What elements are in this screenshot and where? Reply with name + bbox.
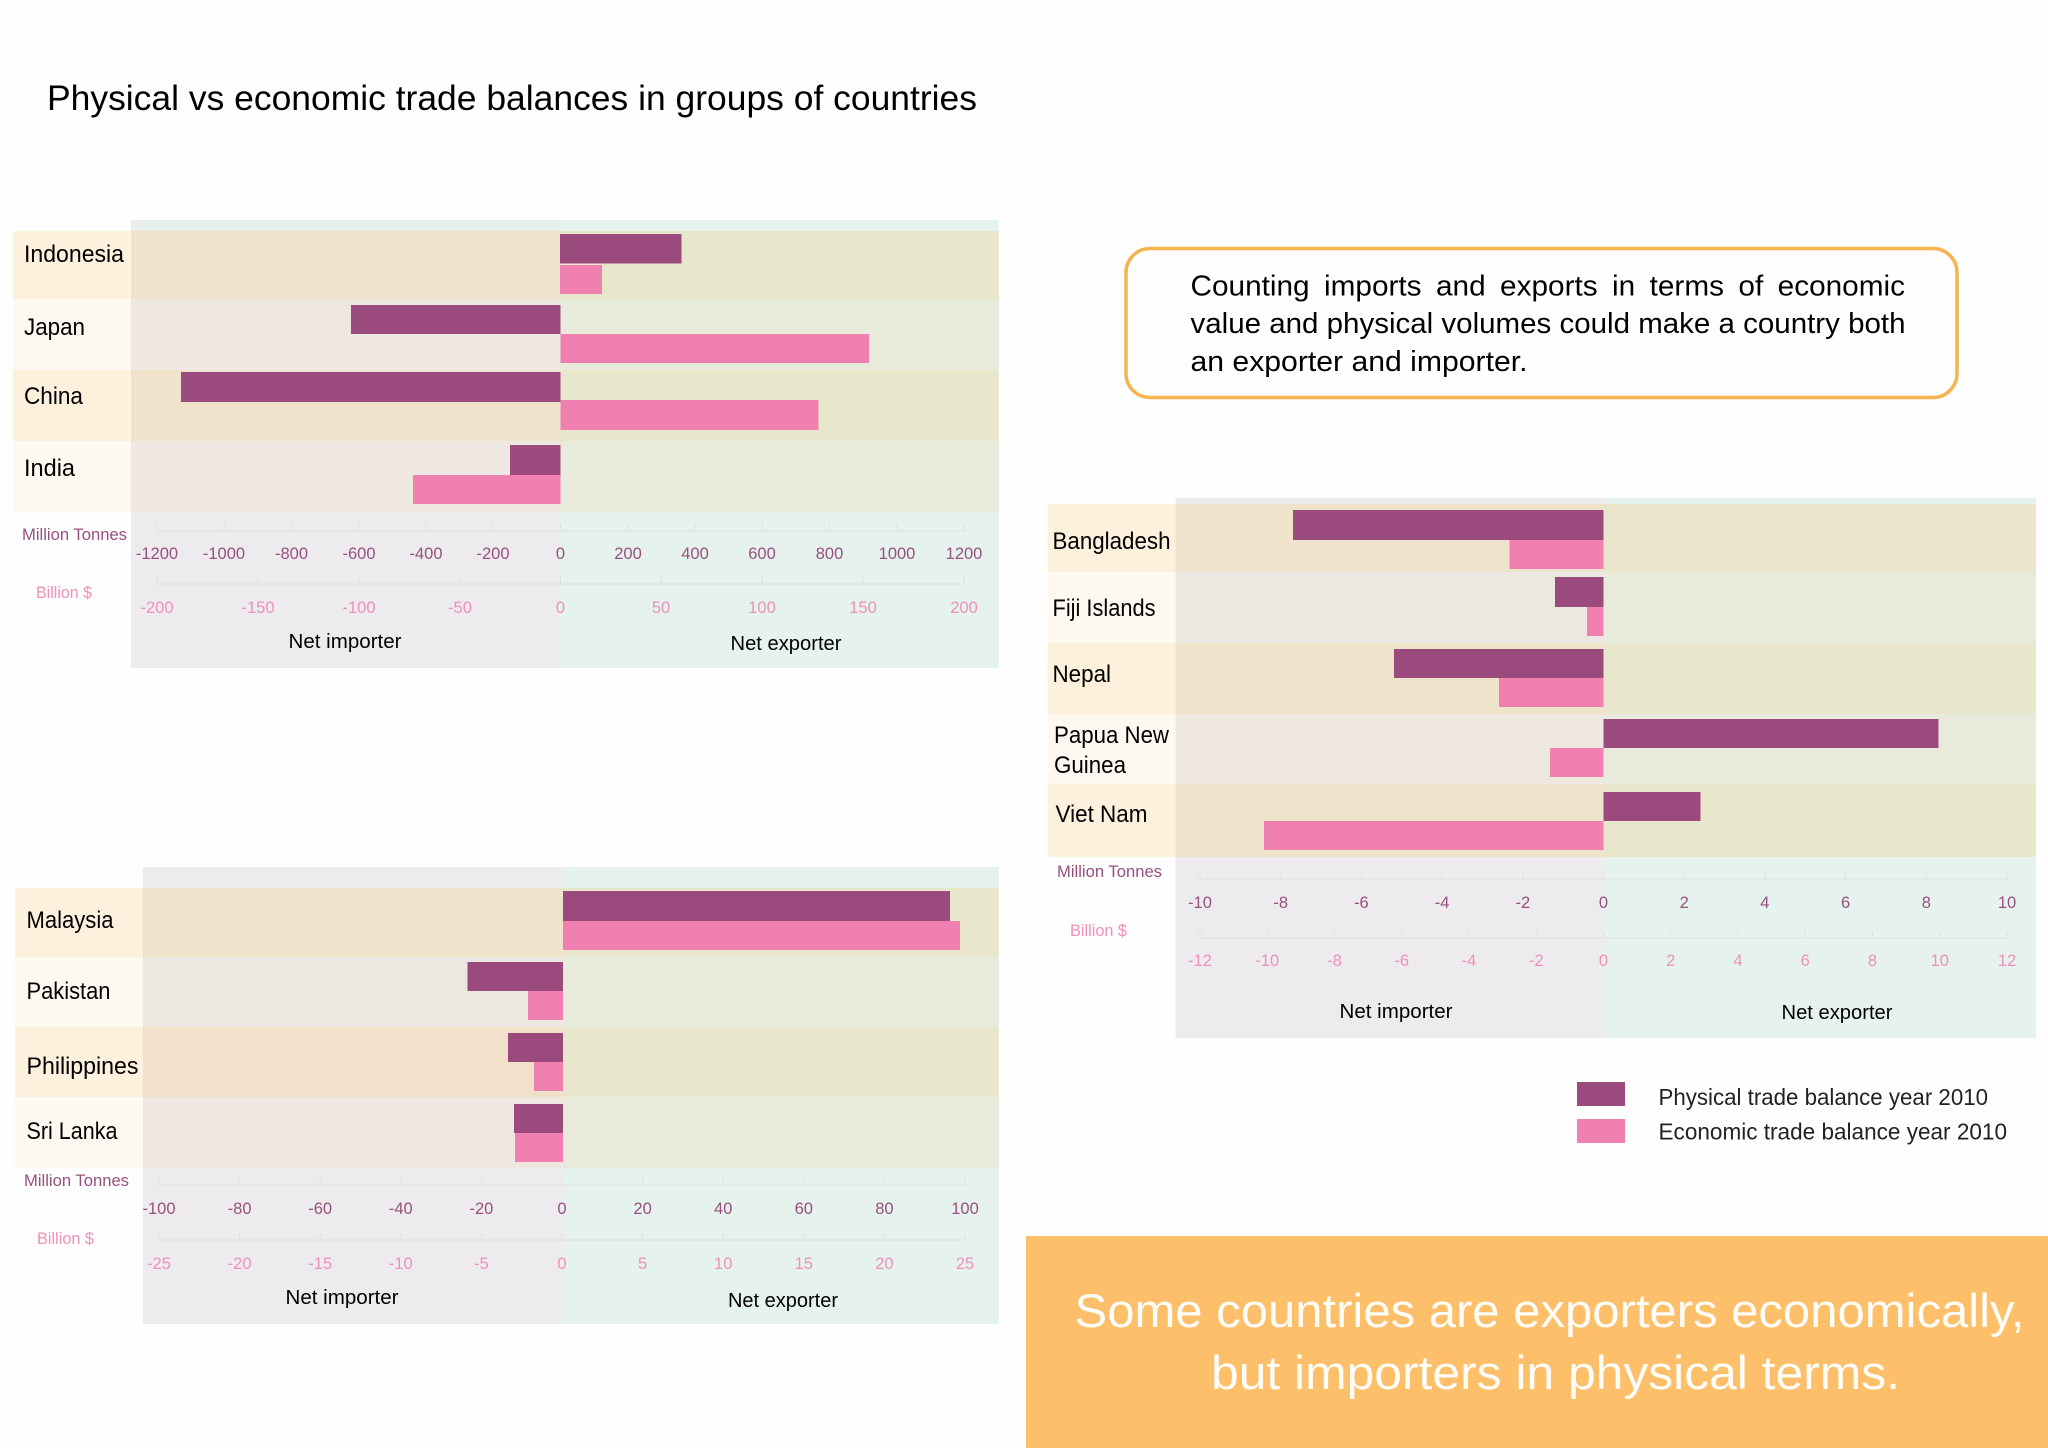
axis: billion dollars: -5 <box>474 1255 489 1273</box>
axis: million tonnes <box>24 1172 979 1218</box>
bars: Viet Nam <box>1264 792 1700 850</box>
bars: Pakistan <box>468 962 563 1020</box>
bars: Fiji Islands <box>1555 577 1604 636</box>
axis: billion dollars: 10 <box>1931 952 1949 970</box>
axis: billion dollars <box>36 575 978 617</box>
axis: billion dollars: -25 <box>147 1255 171 1273</box>
axis: million tonnes: 40 <box>714 1200 732 1218</box>
panel: chart Malaysia Pakistan Philippines Sri Lanka <box>15 867 999 1324</box>
axis: billion dollars: 5 <box>638 1255 647 1273</box>
axis: million tonnes: -400 <box>409 545 443 563</box>
axis: million tonnes: -20 <box>469 1200 493 1218</box>
title: Physical vs economic trade balances in groups of countries <box>47 79 977 118</box>
label: Fiji Islands: Fiji Islands <box>1052 595 1156 622</box>
axis: million tonnes: -100 <box>142 1200 176 1218</box>
axis: billion dollars: 2 <box>1666 952 1675 970</box>
label: India: India <box>24 455 76 482</box>
axis: billion dollars: 0 <box>556 599 565 617</box>
axis: billion dollars: -8 <box>1327 952 1342 970</box>
label: Japan: Japan <box>24 314 85 341</box>
axis: billion dollars: -4 <box>1462 952 1476 970</box>
label: Philippines: Philippines <box>26 1053 138 1080</box>
axis: billion dollars: Billion $ <box>36 584 92 602</box>
axis: million tonnes: 4 <box>1760 894 1769 912</box>
axis: billion dollars <box>37 1230 974 1273</box>
axis: billion dollars: -15 <box>308 1255 332 1273</box>
axis: million tonnes: -1200 <box>136 545 178 563</box>
label: Papua New Guinea <box>1054 722 1170 779</box>
bars: Japan <box>351 305 869 363</box>
panel: chart Bangladesh Fiji Nepal Papua New Guinea Viet Nam <box>1048 498 2036 1038</box>
callout: counting imports and exports: Counting imports and exports in terms of economic <box>1190 270 1905 302</box>
axis: million tonnes: 60 <box>795 1200 813 1218</box>
label: Indonesia: Indonesia <box>24 241 125 268</box>
bars: China <box>181 372 818 430</box>
label: Malaysia: Malaysia <box>26 907 114 934</box>
label: Sri Lanka: Sri Lanka <box>26 1118 118 1145</box>
axis: million tonnes: -10 <box>1188 894 1212 912</box>
axis: billion dollars: 150 <box>849 599 877 617</box>
axis: million tonnes: Million Tonnes <box>24 1172 129 1190</box>
axis: billion dollars: 12 <box>1998 952 2016 970</box>
label: net importer: Net importer <box>286 1287 399 1309</box>
bars: India <box>413 445 560 504</box>
axis: billion dollars: 0 <box>557 1255 567 1273</box>
axis: million tonnes: 0 <box>557 1200 567 1218</box>
axis: million tonnes: 80 <box>875 1200 894 1218</box>
axis: billion dollars: -20 <box>228 1255 252 1273</box>
axis: billion dollars: 0 <box>1599 952 1608 970</box>
axis: million tonnes: 10 <box>1998 894 2016 912</box>
axis: million tonnes: Million Tonnes <box>22 526 127 544</box>
axis: million tonnes: -40 <box>389 1200 413 1218</box>
axis: billion dollars: -10 <box>1255 952 1279 970</box>
axis: billion dollars: Billion $ <box>37 1230 94 1248</box>
bars: Papua New Guinea <box>1550 719 1938 777</box>
bars: Indonesia <box>560 234 682 294</box>
banner: conclusion <box>1026 1236 2048 1448</box>
axis: million tonnes: 20 <box>633 1200 652 1218</box>
axis: billion dollars: -100 <box>342 599 376 617</box>
axis: million tonnes: -1000 <box>203 545 245 563</box>
axis: million tonnes: 200 <box>614 545 642 563</box>
axis: billion dollars <box>1070 922 2016 970</box>
axis: billion dollars: 6 <box>1801 952 1810 970</box>
label: China: China <box>24 383 84 410</box>
label: net exporter: Net exporter <box>728 1290 838 1312</box>
axis: million tonnes: 2 <box>1680 894 1689 912</box>
axis: billion dollars: 8 <box>1868 952 1877 970</box>
axis: million tonnes: -60 <box>308 1200 332 1218</box>
label: Viet Nam: Viet Nam <box>1056 801 1148 828</box>
label: Papua New Guinea: Papua New <box>1054 722 1170 749</box>
axis: million tonnes: 800 <box>816 545 843 563</box>
axis: million tonnes: -2 <box>1515 894 1530 912</box>
axis: billion dollars: -6 <box>1394 952 1409 970</box>
axis: billion dollars: 10 <box>714 1255 732 1273</box>
axis: million tonnes: 1200 <box>946 545 982 563</box>
axis: billion dollars: 4 <box>1733 952 1743 970</box>
axis: billion dollars: -2 <box>1529 952 1544 970</box>
callout: counting imports and exports: value and physical volumes could make a country both <box>1190 308 1906 340</box>
axis: million tonnes: 400 <box>681 545 709 563</box>
axis: million tonnes: -600 <box>342 545 376 563</box>
bars: Philippines <box>508 1033 563 1091</box>
axis: billion dollars: -10 <box>389 1255 413 1273</box>
axis: billion dollars: 100 <box>748 599 776 617</box>
axis: million tonnes <box>1057 863 2016 912</box>
axis: billion dollars: -200 <box>140 599 174 617</box>
axis: million tonnes <box>22 523 982 563</box>
axis: million tonnes: -4 <box>1435 894 1449 912</box>
axis: billion dollars: 25 <box>956 1255 974 1273</box>
bars: Malaysia <box>563 891 960 950</box>
axis: million tonnes: 0 <box>1599 894 1608 912</box>
axis: million tonnes: 600 <box>748 545 776 563</box>
label: net importer: Net importer <box>1340 1001 1453 1023</box>
label: net exporter: Net exporter <box>730 633 842 655</box>
label: Nepal: Nepal <box>1052 661 1111 688</box>
legend: Physical trade balance year 2010 <box>1658 1084 1988 1110</box>
axis: billion dollars: 15 <box>795 1255 813 1273</box>
banner: conclusion: Some countries are exporters economically, <box>1074 1284 2024 1337</box>
axis: billion dollars: 50 <box>652 599 670 617</box>
legend: Economic trade balance year 2010 <box>1658 1118 2007 1144</box>
axis: million tonnes: 0 <box>556 545 565 563</box>
banner: conclusion: but importers in physical terms. <box>1211 1346 1900 1399</box>
label: net importer: Net importer <box>288 631 402 653</box>
axis: billion dollars: Billion $ <box>1070 922 1127 940</box>
axis: million tonnes: -80 <box>228 1200 252 1218</box>
axis: billion dollars: 20 <box>875 1255 894 1273</box>
callout: counting imports and exports: an exporter and importer. <box>1190 346 1528 378</box>
bars: Sri Lanka <box>514 1104 563 1162</box>
axis: million tonnes: -800 <box>275 545 308 563</box>
axis: million tonnes: Million Tonnes <box>1057 863 1162 881</box>
panel: chart Indonesia Japan China India <box>13 220 999 668</box>
axis: million tonnes: 6 <box>1841 894 1850 912</box>
bars: Bangladesh <box>1293 510 1604 569</box>
bars: Nepal <box>1394 649 1604 707</box>
axis: billion dollars: -150 <box>241 599 275 617</box>
label: Pakistan: Pakistan <box>26 978 110 1005</box>
axis: billion dollars: -12 <box>1188 952 1212 970</box>
label: Papua New Guinea: Guinea <box>1054 752 1127 779</box>
callout: counting imports and exports <box>1126 248 1957 398</box>
axis: million tonnes: -200 <box>476 545 510 563</box>
axis: million tonnes: 1000 <box>879 545 915 563</box>
label: Bangladesh: Bangladesh <box>1052 528 1170 555</box>
axis: billion dollars: -50 <box>448 599 472 617</box>
axis: million tonnes: 100 <box>951 1200 979 1218</box>
axis: billion dollars: 200 <box>950 599 978 617</box>
axis: million tonnes: -8 <box>1273 894 1288 912</box>
axis: million tonnes: 8 <box>1922 894 1931 912</box>
label: net exporter: Net exporter <box>1782 1002 1893 1024</box>
legend <box>1577 1082 2007 1144</box>
axis: million tonnes: -6 <box>1354 894 1369 912</box>
